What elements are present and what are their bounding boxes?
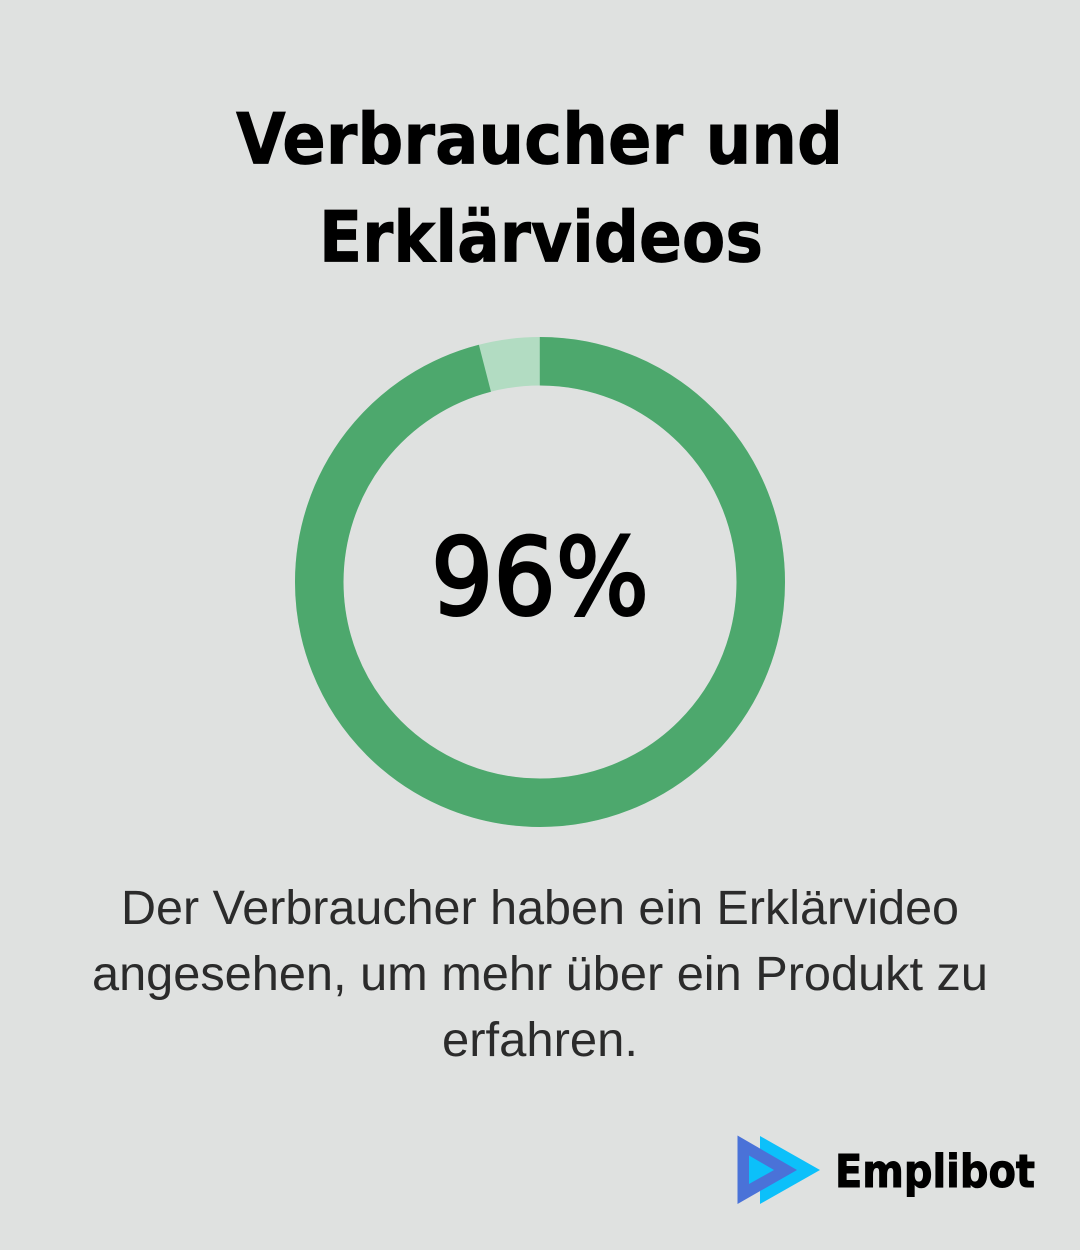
- icon: play triangles: [738, 1136, 820, 1204]
- description text: erfahren.: [442, 1014, 638, 1067]
- logo: Emplibot: [738, 1136, 1035, 1204]
- description text: [92, 882, 988, 1067]
- description text: angesehen, um mehr über ein Produkt zu: [92, 948, 988, 1001]
- big percentage value: 96%: [431, 516, 649, 639]
- donut value arc: 96%: [319, 361, 761, 803]
- title: Verbraucher und: [236, 98, 843, 180]
- donut chart: 96%: [319, 361, 761, 803]
- donut track: remaining 4%: [319, 361, 761, 803]
- title: [236, 98, 843, 278]
- title: Erklärvideos: [319, 196, 763, 278]
- logo wordmark: Emplibot: [835, 1145, 1035, 1198]
- description text: Der Verbraucher haben ein Erklärvideo: [121, 882, 959, 935]
